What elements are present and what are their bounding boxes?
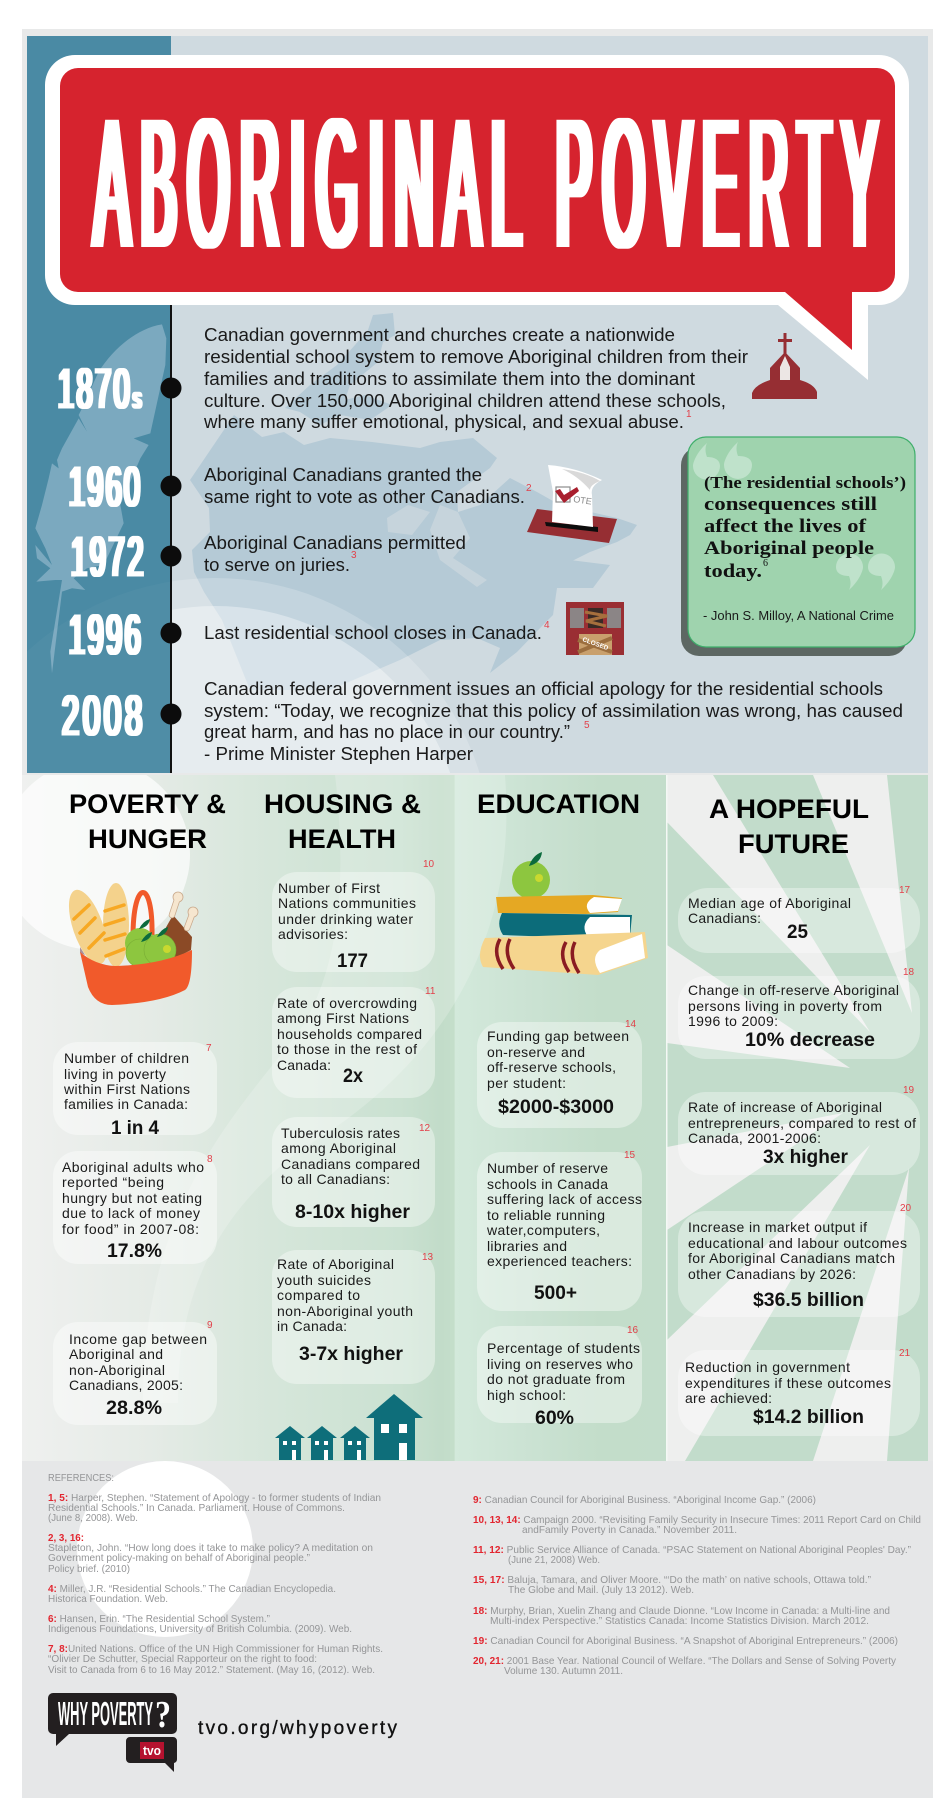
year labels: 1972 (71, 524, 146, 589)
stat: median age: Median age of Aboriginal (688, 895, 851, 911)
stat: median age (678, 885, 920, 953)
stat: children in poverty: within First Nations (63, 1081, 190, 1097)
references: right column: 15, 17: Baluja, Tamara, and Oliver Moore. “‘Do the math’ on native schools, Ottawa told.” (473, 1574, 871, 1586)
stat: off-reserve poverty (678, 967, 920, 1059)
stat: funding gap: $2000-$3000 (498, 1097, 614, 1118)
icon: food basket (61, 883, 198, 1005)
website url: tvo.org/whypoverty (198, 1718, 398, 1739)
references: left column: Visit to Canada from 6 to 16 May 2012.” Statement. (May 16, (2012). Web. (48, 1664, 375, 1676)
stat: overcrowding: 2x (343, 1066, 363, 1087)
stat: median age: 17 (899, 885, 911, 896)
stat: overcrowding (272, 986, 436, 1098)
stat: hungry adults (53, 1151, 217, 1264)
stat: government expenditures (678, 1348, 920, 1436)
text: 1870s: culture. Over 150,000 Aboriginal children attend these schools, (204, 391, 726, 411)
text: 1870s: residential school system to remove Aboriginal children from their (204, 347, 748, 367)
stat: children in poverty: families in Canada: (64, 1096, 188, 1112)
stat: median age: Canadians: (688, 910, 761, 926)
stat: market output: $36.5 billion (753, 1290, 864, 1311)
stat: income gap: Canadians, 2005: (69, 1377, 183, 1393)
title: ABORIGINAL POVERTY (94, 80, 889, 286)
text: 1996: Last residential school closes in Canada. (204, 623, 542, 643)
stat: reserve schools: 500+ (534, 1283, 577, 1304)
stat: tuberculosis: 12 (419, 1123, 431, 1134)
text: 1870s (203, 325, 748, 432)
stat: tuberculosis (272, 1117, 435, 1227)
stat: drinking water advisories (272, 859, 435, 972)
stat: hungry adults: Aboriginal adults who (62, 1159, 204, 1175)
references: right column: Volume 130. Autumn 2011. (504, 1665, 623, 1677)
heading: poverty and hunger: POVERTY & (69, 789, 226, 819)
quote text (704, 473, 906, 582)
stat: graduation: high school: (487, 1387, 566, 1403)
stat: market output: 20 (900, 1203, 912, 1214)
icon: ballot box (527, 465, 617, 543)
heading: education: EDUCATION (477, 789, 640, 819)
references: left column: Policy brief. (2010) (48, 1563, 130, 1575)
stat: off-reserve poverty: 10% decrease (745, 1030, 875, 1051)
stat: government expenditures: $14.2 billion (753, 1407, 864, 1428)
year labels: 1870 (58, 356, 132, 421)
stat: tuberculosis: Canadians compared (281, 1156, 420, 1172)
text: 1972 (204, 533, 466, 575)
stat: children in poverty: living in poverty (64, 1066, 166, 1082)
stat: funding gap: 14 (625, 1019, 637, 1030)
quote text: consequences still (704, 494, 877, 515)
stat: overcrowding: among First Nations (277, 1010, 409, 1026)
references: left column: Government policy-making on behalf of Aboriginal people.” (48, 1552, 310, 1564)
stat: graduation: living on reserves who (487, 1356, 633, 1372)
stat: overcrowding: Rate of overcrowding (277, 995, 417, 1011)
quote text: affect the lives of (704, 516, 867, 537)
stat: youth suicides: 13 (422, 1252, 434, 1263)
year labels (58, 356, 146, 747)
references: left column: Historica Foundation. Web. (48, 1593, 168, 1605)
quote attribution: - John S. Milloy, A National Crime (703, 608, 894, 623)
stat: income gap: Aboriginal and (69, 1346, 163, 1362)
stat: government expenditures: expenditures if these outcomes (685, 1375, 891, 1391)
references: left column: Indigenous Foundations, University of British Columbia. (2009). Web. (48, 1623, 352, 1635)
stat: off-reserve poverty: persons living in poverty from (688, 998, 882, 1014)
stat: funding gap: off-reserve schools, (487, 1059, 616, 1075)
panel: hopeful future background (666, 775, 928, 1461)
stat: hungry adults: hungry but not eating (62, 1190, 202, 1206)
stat: children in poverty: 7 (206, 1043, 212, 1054)
stat: tuberculosis: to all Canadians: (281, 1171, 390, 1187)
stat: government expenditures: are achieved: (685, 1390, 772, 1406)
stat: entrepreneurs (678, 1085, 920, 1175)
quote text: Aboriginal people (704, 538, 874, 559)
stat: entrepreneurs: 3x higher (763, 1147, 849, 1168)
references: left column: 2, 3, 16: (48, 1532, 84, 1544)
text: 2008: 5 (584, 720, 590, 731)
stat: hungry adults: 17.8% (107, 1241, 162, 1262)
icon: closed door: CLOSED (581, 636, 609, 652)
text: 2008: system: “Today, we recognize that this policy of assimilation was wrong, has caused (204, 701, 903, 721)
text: 1870s: Canadian government and churches create a nationwide (204, 325, 675, 345)
quote text: 6 (763, 558, 768, 569)
stat: off-reserve poverty: Change in off-reserve Aboriginal (688, 982, 899, 998)
references: left column: 4: Miller, J.R. “Residential Schools.” The Canadian Encyclopedia. (48, 1583, 336, 1595)
year labels: 1996 (69, 602, 143, 667)
stat: reserve schools: to reliable running (487, 1207, 605, 1223)
references: left column: Stapleton, John. “How long does it take to make policy? A meditation on (48, 1542, 373, 1554)
icon: books and apple (480, 852, 648, 975)
references: left column: (June 8, 2008). Web. (48, 1512, 138, 1524)
stat: income gap: non-Aboriginal (69, 1362, 165, 1378)
stat: tuberculosis: 8-10x higher (295, 1202, 411, 1223)
stat: funding gap: Funding gap between (487, 1028, 629, 1044)
panel: statistics background (0, 760, 667, 1461)
stat: drinking water advisories: 177 (337, 951, 368, 972)
logo: why poverty: ? (155, 1694, 171, 1736)
references: right column: 18: Murphy, Brian, Xuelin Zhang and Claude Dionne. “Low Income in Canada: a Multi-line and (473, 1605, 890, 1617)
text: 2008 (204, 679, 903, 764)
stat: drinking water advisories: advisories: (278, 926, 348, 942)
references: right column: (June 21, 2008) Web. (508, 1554, 600, 1566)
stat: graduation (477, 1325, 642, 1429)
stat: youth suicides: 3-7x higher (299, 1344, 404, 1365)
stat: entrepreneurs: 19 (903, 1085, 915, 1096)
timeline line (160, 305, 182, 773)
stat: children in poverty: 1 in 4 (111, 1118, 159, 1139)
stat: market output: Increase in market output if (688, 1219, 867, 1235)
stat: market output: educational and labour outcomes (688, 1235, 907, 1251)
text: 1960: 2 (526, 483, 532, 494)
stat: tuberculosis: Tuberculosis rates (281, 1125, 400, 1141)
references: right column: Multi-index Perspective.” Statistics Canada: Income Statistics Division. March 2012. (490, 1615, 869, 1627)
logo: why poverty (48, 1693, 177, 1772)
stat: hungry adults: 8 (207, 1154, 213, 1165)
stat: income gap: 9 (207, 1320, 213, 1331)
stat: off-reserve poverty: 1996 to 2009: (688, 1013, 778, 1029)
stat: reserve schools: 15 (624, 1150, 636, 1161)
stat: hungry adults: reported “being (62, 1174, 164, 1190)
logo: why poverty: tvo (143, 1744, 161, 1758)
stat: graduation: do not graduate from (487, 1371, 625, 1387)
stat: median age: 25 (787, 922, 808, 943)
stat: drinking water advisories: Nations communities (278, 895, 416, 911)
references: left column: 7, 8:United Nations. Office of the UN High Commissioner for Human Rights. (48, 1643, 383, 1655)
stat: entrepreneurs: Canada, 2001-2006: (688, 1130, 821, 1146)
stat: hungry adults: for food” in 2007-08: (62, 1221, 199, 1237)
quote text: today. (704, 561, 762, 582)
references: right column: 10, 13, 14: Campaign 2000. “Revisiting Family Security in Insecure Times: 2011 Report Card on Child (473, 1514, 921, 1526)
stat: youth suicides: youth suicides (277, 1272, 371, 1288)
text: 1972: 3 (351, 550, 357, 561)
stat: market output: for Aboriginal Canadians match (688, 1250, 895, 1266)
quote text: (The residential schools’) (704, 473, 906, 492)
stat: reserve schools: water,computers, (486, 1222, 600, 1238)
references: left column: “Olivier De Schutter, Special Rapporteur on the right to food: (48, 1653, 317, 1665)
heading: a hopeful future: FUTURE (738, 829, 849, 859)
text: 1870s: families and traditions to assimilate them into the dominant (204, 369, 695, 389)
icon: houses (275, 1394, 423, 1460)
stat: graduation: 60% (535, 1408, 574, 1429)
heading: a hopeful future (709, 794, 869, 859)
stat: income gap: Income gap between (69, 1331, 207, 1347)
stat: market output: other Canadians by 2026: (688, 1266, 856, 1282)
text: 2008: great harm, and has no place in our country.” (204, 722, 570, 742)
stat: reserve schools: Number of reserve (487, 1160, 608, 1176)
stat: reserve schools: schools in Canada (487, 1176, 608, 1192)
stat: government expenditures: 21 (899, 1348, 911, 1359)
stat: children in poverty (53, 1042, 217, 1139)
heading: poverty and hunger: HUNGER (88, 824, 207, 854)
text: 1960: Aboriginal Canadians granted the (204, 465, 482, 485)
stat: overcrowding: to those in the rest of (277, 1041, 417, 1057)
heading: a hopeful future: A HOPEFUL (709, 794, 869, 824)
text: 1960 (204, 465, 532, 507)
stat: reserve schools (477, 1150, 642, 1311)
stat: reserve schools: experienced teachers: (487, 1253, 632, 1269)
references: right column: The Globe and Mail. (July 13 2012). Web. (508, 1584, 694, 1596)
text: 1996: 4 (544, 620, 550, 631)
icon: ballot box: OTE (573, 494, 592, 507)
stat: entrepreneurs: Rate of increase of Aboriginal (688, 1099, 882, 1115)
heading: housing and health (264, 789, 421, 854)
stat: funding gap (477, 1019, 642, 1128)
year labels: 2008 (62, 684, 146, 747)
stat: youth suicides: non-Aboriginal youth (277, 1303, 413, 1319)
references: left column (48, 1472, 383, 1676)
stat: children in poverty: Number of children (64, 1050, 189, 1066)
text: WHY POVERTY (58, 1695, 153, 1732)
icon: quote marks (693, 442, 895, 590)
stat: graduation: 16 (627, 1325, 639, 1336)
references: right column (473, 1494, 921, 1677)
year labels: s (133, 382, 141, 415)
references: left column: Residential Schools.” In Canada. Parliament. House of Commons. (48, 1502, 345, 1514)
icon: feather (35, 324, 166, 673)
stat: funding gap: per student: (487, 1075, 566, 1091)
text: 2008: - Prime Minister Stephen Harper (204, 744, 473, 764)
panel: timeline background (27, 36, 928, 773)
stat: drinking water advisories: under drinking water (278, 911, 413, 927)
references: left column: REFERENCES: (48, 1472, 114, 1484)
text: 1870s: where many suffer emotional, physical, and sexual abuse. (203, 412, 684, 432)
stat: graduation: Percentage of students (487, 1340, 640, 1356)
stat: overcrowding: households compared (277, 1026, 422, 1042)
heading: poverty and hunger (69, 789, 226, 854)
heading: housing and health: HEALTH (288, 824, 396, 854)
references: right column: andFamily Poverty in Canada.” November 2011. (522, 1524, 737, 1536)
stat: overcrowding: Canada: (277, 1057, 331, 1073)
stat: income gap (53, 1320, 217, 1425)
references: left column: 6: Hansen, Erin. “The Residential School System.” (48, 1613, 270, 1625)
references: right column: 20, 21: 2001 Base Year. National Council of Welfare. “The Dollars and Sense of Solving Poverty (473, 1655, 897, 1667)
heading: housing and health: HOUSING & (264, 789, 421, 819)
references: left column: 1, 5: Harper, Stephen. “Statement of Apology - to former students of Indian (48, 1492, 381, 1504)
icon: church (752, 333, 817, 399)
stat: youth suicides: Rate of Aboriginal (277, 1256, 394, 1272)
references: right column: 9: Canadian Council for Aboriginal Business. “Aboriginal Income Gap.” (2006) (473, 1494, 816, 1506)
text: 2008: Canadian federal government issues an official apology for the residential schools (204, 679, 883, 699)
stat: reserve schools: suffering lack of access (487, 1191, 642, 1207)
text: 1960: same right to vote as other Canadians. (204, 487, 525, 507)
icon: closed door (566, 602, 624, 655)
stat: drinking water advisories: 10 (423, 859, 435, 870)
stat: overcrowding: 11 (425, 986, 436, 997)
stat: tuberculosis: among Aboriginal (281, 1140, 396, 1156)
text: 1870s: 1 (686, 409, 692, 420)
map of Canada (190, 313, 637, 690)
stat: drinking water advisories: Number of First (278, 880, 380, 896)
panel: references background (22, 1461, 933, 1798)
year labels: 1960 (69, 454, 142, 519)
stat: funding gap: on-reserve and (487, 1044, 585, 1060)
stat: income gap: 28.8% (106, 1398, 162, 1419)
stat: youth suicides (272, 1250, 435, 1384)
stat: market output (678, 1203, 920, 1317)
references: right column: 19: Canadian Council for Aboriginal Business. “A Snapshot of Aboriginal Entrepreneurs.” (2006) (473, 1635, 898, 1647)
text: 1972: Aboriginal Canadians permitted (204, 533, 466, 553)
text: 1972: to serve on juries. (204, 555, 350, 575)
references: right column: 11, 12: Public Service Alliance of Canada. “PSAC Statement on National Aboriginal Peoples' Day.” (473, 1544, 911, 1556)
stat: reserve schools: libraries and (487, 1238, 567, 1254)
stat: hungry adults: due to lack of money (62, 1205, 200, 1221)
stat: youth suicides: compared to (277, 1287, 360, 1303)
panel: quote (681, 437, 915, 656)
stat: youth suicides: in Canada: (277, 1318, 347, 1334)
stat: entrepreneurs: entrepreneurs, compared to rest of (688, 1115, 916, 1131)
stat: government expenditures: Reduction in government (685, 1359, 850, 1375)
title speech bubble (45, 55, 909, 380)
stat: off-reserve poverty: 18 (903, 967, 915, 978)
